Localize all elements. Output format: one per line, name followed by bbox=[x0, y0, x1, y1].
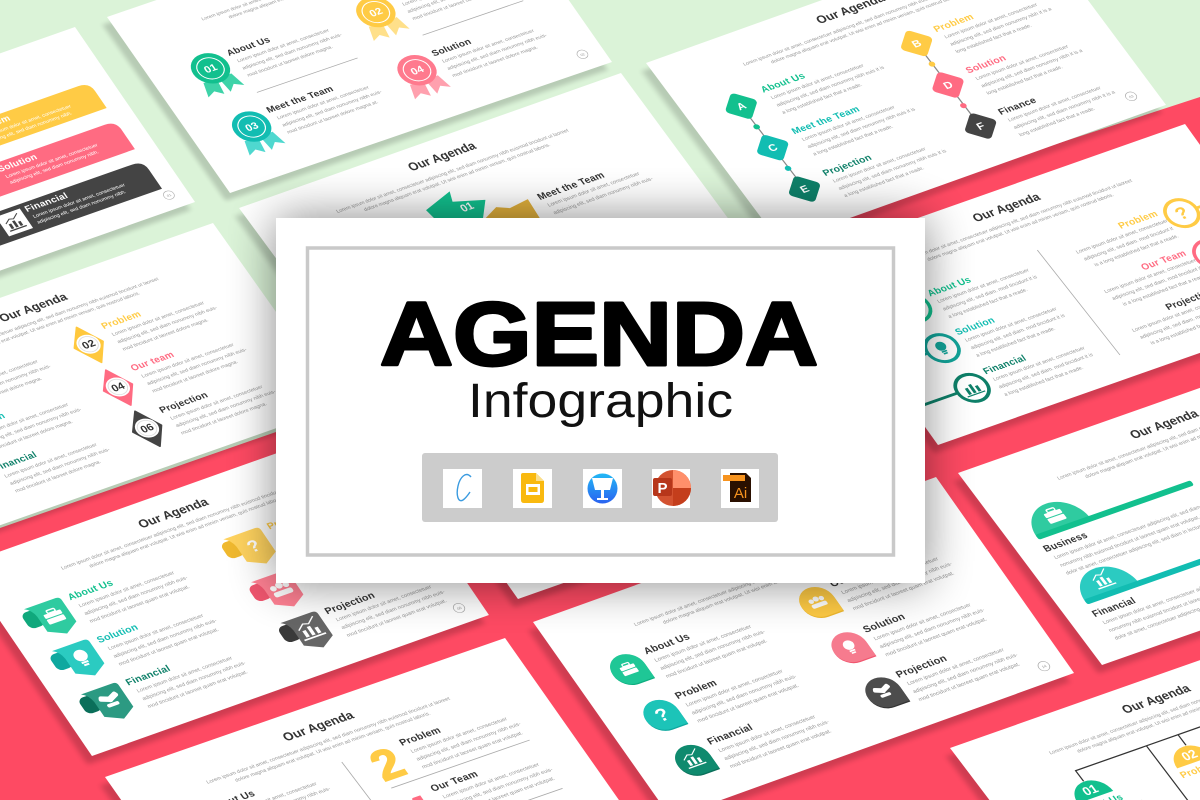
numeral 2: 2 bbox=[360, 739, 415, 791]
badge 01: 01 bbox=[202, 62, 220, 76]
projection bbox=[157, 370, 283, 438]
icon: powerpoint bbox=[652, 469, 691, 508]
about us: About Us bbox=[366, 216, 415, 240]
title: Our Agenda bbox=[280, 708, 357, 744]
slide: ribbon icons, lower left bbox=[0, 424, 493, 765]
about us: About Us bbox=[642, 632, 693, 657]
about us bbox=[642, 609, 773, 681]
financial body: Lorem ipsum dolor sit amet, consectetuer bbox=[32, 183, 127, 220]
about us bbox=[925, 256, 1045, 321]
projection: adipiscing elit, sed diam nonummy nibh euis- bbox=[175, 389, 278, 429]
projection bbox=[323, 570, 452, 640]
about us: adipiscing elit, sed diam nonummy nibh euis it is bbox=[775, 65, 886, 108]
subtitle: dolore magna aliquam erat volutpat. Ut wisi enim ad minim veniam, quis nostrud laboris. bbox=[926, 193, 1115, 263]
projection: Lorem ipsum dolor sit amet, consectetuer bbox=[832, 146, 928, 184]
finance: Lorem ipsum dolor sit amet, consectetuer bbox=[1007, 86, 1103, 123]
solution: long established fact that a reade. bbox=[986, 65, 1064, 96]
solution: adipiscing elit, sed diam nonummy nibh euis- bbox=[112, 618, 219, 660]
subtitle: Lorem ipsum dolor sit amet, consectetuer adipiscing elit, sed diam nonummy nibh euismod tincidunt ut laoreet bbox=[205, 696, 452, 785]
subtitle: Lorem ipsum dolor sit amet, consectetuer adipiscing elit, sed diam nonummy nibh euismod tincidunt ut laoreet bbox=[335, 128, 571, 215]
about us: Lorem ipsum dolor sit amet, consectetuer bbox=[770, 63, 866, 101]
diamond A: A bbox=[734, 101, 749, 113]
meet the team: mod tincidunt ut laoreet dolore magna at. bbox=[286, 100, 380, 135]
title: Our Agenda bbox=[135, 495, 212, 531]
pink bar bbox=[0, 121, 135, 210]
slide: bars agenda, top left bbox=[0, 27, 199, 345]
drop: financial bbox=[668, 740, 720, 780]
diamond F: F bbox=[974, 121, 988, 133]
circle: problem bbox=[1159, 181, 1200, 231]
solution bbox=[964, 30, 1090, 97]
page number: 14 bbox=[1041, 663, 1048, 669]
finance: long established fact that a reade. bbox=[1018, 106, 1097, 138]
solution: adipiscing elit, sed diam nonummy nibh it is a bbox=[980, 48, 1084, 89]
problem bbox=[397, 702, 528, 772]
dome: business bbox=[1019, 459, 1194, 540]
page number bbox=[1123, 91, 1139, 102]
financial: Lorem ipsum dolor sit amet, consectetuer bbox=[4, 442, 99, 479]
arrow 01: 01 bbox=[458, 201, 477, 215]
drop: our team bbox=[792, 582, 844, 623]
slide: circles, right bbox=[796, 123, 1200, 453]
main card bbox=[276, 218, 925, 583]
meet the team bbox=[264, 70, 389, 137]
problem: Problem bbox=[932, 12, 977, 35]
solution: adipiscing elit, sed diam nonummy nibh euis- bbox=[446, 33, 549, 72]
projection: Lorem ipsum dolor sit amet, consectetuer bbox=[169, 384, 265, 421]
about us: About Us bbox=[224, 34, 272, 58]
slide: hidden behind card, bottom bbox=[376, 274, 906, 607]
meet the team: Meet the Team bbox=[264, 83, 335, 115]
marker 06: 06 bbox=[138, 422, 157, 436]
financial bbox=[705, 699, 837, 771]
problem: Lorem ipsum dolor sit amet, consectetuer bbox=[944, 2, 1039, 40]
problem bbox=[673, 654, 804, 725]
financial: a long established fact that a reade. bbox=[1003, 365, 1085, 398]
problem: Problem bbox=[99, 309, 144, 332]
about us: mod tincidunt ut laoreet quam erat volutpat. bbox=[89, 584, 192, 625]
about us: Lorem ipsum dolor sit amet, consectetuer bbox=[654, 624, 753, 664]
meet the team: Meet the Team bbox=[535, 170, 607, 203]
solution body: adipiscing elit, sed diam nonummy nibh. bbox=[9, 150, 100, 186]
circle: about us bbox=[857, 291, 937, 338]
our team: mod tincidunt ut laoreet quam erat volutpat. bbox=[852, 571, 956, 612]
projection: mod tincidunt ut laoreet quam erat volutpat. bbox=[917, 662, 1022, 703]
slide: big numerals, bottom left bbox=[97, 638, 644, 800]
dark bar bbox=[0, 161, 162, 249]
financial: mod tincidunt ut laoreet dolore magna. bbox=[14, 459, 103, 494]
our team: adipiscing elit, sed diam nonummy nibh euis- bbox=[146, 347, 249, 387]
solution bbox=[861, 588, 992, 659]
problem: Lorem ipsum dolor sit amet, consectetuer bbox=[1075, 218, 1170, 255]
financial: Financial bbox=[705, 723, 755, 747]
about us: About Us bbox=[925, 275, 974, 299]
slide: teardrops, bottom centre bbox=[525, 477, 1078, 800]
meet the team: adipiscing elit, sed diam nonummy nibh euis it is bbox=[806, 107, 917, 150]
node 01: 01 bbox=[1079, 781, 1101, 798]
ribbon: solution bbox=[46, 639, 109, 685]
diamond E: E bbox=[798, 184, 812, 196]
financial body: adipiscing elit, sed diam nonummy nibh. bbox=[36, 190, 128, 225]
projection: Projection bbox=[323, 591, 378, 617]
problem: adipiscing elit, sed diam nonummy nibh euis- bbox=[691, 674, 798, 716]
problem: long established fact that a reade. bbox=[955, 23, 1033, 55]
finance: adipiscing elit, sed diam nonummy nibh it is a bbox=[1013, 90, 1117, 131]
about us: a long established fact that a reade. bbox=[947, 287, 1029, 320]
page number bbox=[161, 190, 176, 201]
title: Our Agenda bbox=[970, 190, 1043, 225]
financial: adipiscing elit, sed diam. mod tincidunt it is bbox=[998, 352, 1095, 390]
financial bbox=[0, 428, 117, 496]
title: Our Agenda bbox=[1119, 681, 1194, 716]
icon: google slides bbox=[513, 469, 552, 508]
projection: Projection bbox=[157, 390, 211, 416]
page number bbox=[575, 49, 590, 60]
meet the team: adipiscing elit, sed diam nonummy nibh euis- bbox=[552, 176, 655, 216]
financial: Financial bbox=[124, 664, 173, 688]
marker 02: 02 bbox=[80, 338, 98, 352]
arrow 01 bbox=[419, 182, 501, 238]
slide: arrows agenda, behind card bbox=[231, 73, 765, 406]
projection: adipiscing elit, sed diam nonummy nibh euis it is bbox=[837, 148, 948, 192]
solution bbox=[429, 14, 554, 80]
drop: problem: ? bbox=[650, 704, 674, 726]
solution: Lorem ipsum dolor sit amet, consectetuer bbox=[107, 613, 205, 652]
slide: hexagon numbers, left bbox=[0, 223, 346, 548]
diamond D bbox=[921, 65, 982, 114]
our team: Lorem ipsum dolor sit amet, consectetuer bbox=[442, 762, 541, 800]
icon: illustrator bbox=[721, 469, 759, 508]
slide: domes, right lower bbox=[950, 338, 1200, 674]
node 01 bbox=[1066, 775, 1113, 800]
finance: Finance bbox=[996, 96, 1039, 117]
projection: Projection bbox=[894, 654, 950, 680]
problem bbox=[389, 0, 514, 23]
our team: Our Team bbox=[828, 564, 880, 590]
about us: About Us bbox=[66, 578, 116, 603]
icon: canva bbox=[443, 469, 482, 508]
our team: Lorem ipsum dolor sit amet, consectetuer bbox=[1103, 258, 1198, 295]
solution: Lorem ipsum dolor sit amet, consectetuer bbox=[873, 603, 973, 642]
page number: 03 bbox=[1128, 95, 1135, 99]
marker 06 bbox=[121, 407, 173, 451]
about us: About Us bbox=[759, 71, 808, 95]
diamond E bbox=[778, 169, 831, 209]
problem: Problem bbox=[1116, 209, 1161, 231]
problem: Problem bbox=[265, 509, 311, 532]
about us bbox=[224, 13, 349, 80]
our team bbox=[1095, 247, 1200, 310]
solution: mod tincidunt ut laoreet quam erat volutpat. bbox=[118, 627, 221, 667]
financial: Lorem ipsum dolor sit amet, consectetuer bbox=[136, 656, 234, 694]
dome: financial bbox=[1067, 523, 1200, 605]
financial: Lorem ipsum dolor sit amet, consectetuer bbox=[718, 714, 817, 754]
marker 04: 04 bbox=[109, 381, 128, 394]
our team: Our Team bbox=[429, 769, 481, 794]
financial bbox=[981, 334, 1100, 399]
problem: mod tincidunt ut laoreet quam erat volutpat. bbox=[696, 683, 801, 724]
subtitle: Lorem ipsum dolor sit amet, consectetuer adipiscing elit, sed diam nonummy nibh euismod tincidunt ut laoreet bbox=[899, 178, 1134, 264]
meet the team: Meet the Team bbox=[790, 104, 862, 137]
financial: mod tincidunt ut laoreet quam erat volutpat. bbox=[147, 669, 250, 710]
finance bbox=[996, 72, 1122, 139]
our team: Our Team bbox=[1139, 248, 1189, 273]
marker 02 bbox=[63, 323, 115, 367]
diamond C: C bbox=[766, 142, 781, 154]
circle: problem: ? bbox=[1170, 203, 1193, 223]
connector lines bbox=[1076, 700, 1200, 800]
about us: mod tincidunt ut laoreet quam erat volutpat. bbox=[665, 638, 769, 680]
our team bbox=[828, 542, 959, 613]
badge 03 bbox=[224, 106, 287, 157]
about us bbox=[66, 556, 195, 626]
about us: adipiscing elit, sed diam nonummy nibh euis- bbox=[241, 32, 344, 71]
our team: mod tincidunt ut laoreet dolore magna. bbox=[151, 359, 240, 394]
projection: Lorem ipsum dolor sit amet, consectetuer bbox=[335, 584, 433, 623]
financial: mod tincidunt ut laoreet quam erat volutpat. bbox=[729, 729, 833, 770]
projection: mod tincidunt ut laoreet quam erat volutpat. bbox=[346, 598, 449, 639]
ribbon: problem bbox=[218, 527, 281, 573]
solution: mod tincidunt ut laoreet quam erat volutpat. bbox=[884, 617, 989, 658]
solution bbox=[0, 388, 89, 455]
circle: financial bbox=[896, 370, 995, 424]
solution body: Lorem ipsum dolor sit amet, consectetuer bbox=[5, 143, 100, 180]
projection: a long established fact that a reade. bbox=[843, 166, 926, 199]
meet the team bbox=[535, 157, 655, 217]
financial: Financial bbox=[981, 353, 1029, 377]
projection: mod tincidunt ut laoreet dolore magna. bbox=[180, 402, 268, 436]
problem: mod tincidunt ut laoreet quam erat volutpat. bbox=[421, 730, 525, 770]
drop: problem bbox=[636, 695, 688, 735]
title: Our Agenda bbox=[707, 547, 786, 584]
financial: adipiscing elit, sed diam nonummy nibh euis- bbox=[9, 447, 112, 487]
circle: solution bbox=[886, 331, 965, 377]
about us: adipiscing elit, sed diam. mod tincidunt it is bbox=[942, 274, 1039, 312]
icon: illustrator: Ai bbox=[734, 485, 747, 502]
diamond C bbox=[746, 128, 806, 177]
node 02: 02 bbox=[1178, 747, 1200, 763]
our team bbox=[429, 747, 560, 800]
solution bbox=[95, 599, 224, 669]
projection: adipiscing elit, sed diam nonummy nibh euis- bbox=[340, 589, 446, 631]
about us: a long established fact that a reade. bbox=[781, 82, 864, 116]
badge 04: 04 bbox=[408, 64, 427, 78]
icon: chart box bbox=[0, 209, 33, 236]
problem: is a long established fact that a reade. bbox=[1093, 234, 1180, 268]
diamond A bbox=[715, 87, 775, 135]
ribbon: financial bbox=[75, 682, 138, 728]
our team: Lorem ipsum dolor sit amet, consectetuer bbox=[841, 556, 940, 596]
title: Our Agenda bbox=[405, 139, 479, 174]
drop: projection bbox=[858, 673, 910, 713]
solution: Lorem ipsum dolor sit amet, consectetuer bbox=[441, 28, 536, 64]
financial: adipiscing elit, sed diam nonummy nibh euis- bbox=[723, 719, 831, 762]
node 02 bbox=[1165, 741, 1200, 768]
title: agenda: AGENDA bbox=[380, 285, 818, 385]
meet the team: adipiscing elit, sed diam nonummy nibh euis- bbox=[281, 89, 384, 128]
slide: diamonds agenda, top right bbox=[638, 0, 1170, 251]
problem: Lorem ipsum dolor sit amet, consectetuer bbox=[111, 301, 206, 338]
subtitle: dolore magna aliquam erat volutpat. Ut wisi enim ad minim veniam, quis nostrud laboris. bbox=[234, 711, 432, 783]
problem bbox=[99, 286, 224, 354]
drop: about us bbox=[603, 649, 655, 690]
solution: Lorem ipsum dolor sit amet, consectetuer bbox=[964, 306, 1059, 343]
diamond D: D bbox=[941, 79, 956, 92]
projection bbox=[894, 633, 1025, 704]
problem: Problem bbox=[397, 726, 444, 748]
solution: Solution bbox=[861, 612, 908, 635]
financial: Financial bbox=[1090, 596, 1138, 620]
problem bbox=[1067, 207, 1181, 271]
problem: Lorem ipsum dolor sit amet, consectetuer bbox=[410, 717, 509, 755]
diamond B: B bbox=[910, 38, 924, 50]
diamond F bbox=[954, 107, 1007, 146]
subtitle: dolore magna aliquam erat volutpat. Ut wisi enim ad minim veniam, quis nostrud laboris. bbox=[88, 496, 284, 569]
problem: adipiscing elit, sed diam. mod tincidunt it bbox=[1083, 226, 1175, 262]
ribbon: our team bbox=[245, 570, 308, 616]
projection: Projection bbox=[821, 153, 874, 178]
about us: Lorem ipsum dolor sit amet, consectetuer bbox=[936, 268, 1031, 305]
subtitle: dolore magna aliquam erat volutpat. Ut wisi enim ad minim veniam, quis nostrud laboris. bbox=[662, 550, 861, 626]
solution: Solution bbox=[953, 315, 998, 338]
problem: Problem bbox=[673, 678, 720, 702]
problem: adipiscing elit, sed diam nonummy nibh euis- bbox=[116, 305, 219, 345]
solution: adipiscing elit, sed diam nonummy nibh euis- bbox=[879, 608, 986, 650]
solution: mod tincidunt ut laoreet dolore magna. bbox=[451, 45, 539, 79]
badge 03: 03 bbox=[243, 120, 261, 134]
problem: mod tincidunt ut laoreet dolore magna. bbox=[121, 318, 210, 352]
our team: adipiscing elit, sed diam nonummy nibh euis- bbox=[846, 561, 954, 604]
software icon bar bbox=[422, 453, 778, 522]
shadow: main card bbox=[276, 218, 925, 583]
meet the team: Lorem ipsum dolor sit amet, consectetuer bbox=[547, 171, 641, 208]
about us: Lorem ipsum dolor sit amet, consectetuer bbox=[236, 28, 331, 64]
solution: Solution bbox=[964, 53, 1009, 76]
page number: 06 bbox=[456, 605, 463, 611]
icon: powerpoint: P bbox=[657, 480, 668, 497]
about us: adipiscing elit, sed diam nonummy nibh euis- bbox=[659, 629, 767, 672]
diamond B bbox=[890, 24, 950, 72]
icon: keynote bbox=[583, 469, 622, 508]
about us: adipiscing elit, sed diam nonummy nibh euis- bbox=[83, 575, 189, 617]
financial bbox=[124, 641, 253, 711]
arrow 02 bbox=[476, 197, 549, 245]
solution bbox=[953, 295, 1072, 360]
page number bbox=[451, 602, 467, 614]
solution: a long established fact that a reade. bbox=[975, 326, 1057, 359]
page number: 01 bbox=[166, 193, 172, 198]
financial text: Financial bbox=[22, 190, 70, 214]
ribbon: about us bbox=[18, 597, 81, 643]
circle: our team bbox=[1188, 222, 1200, 271]
about us: mod tincidunt ut laoreet dolore magna. bbox=[246, 45, 334, 78]
ribbon: projection bbox=[275, 611, 338, 657]
meet the team: a long established fact that a reade. bbox=[812, 124, 895, 157]
projection bbox=[1123, 286, 1200, 349]
our team: Lorem ipsum dolor sit amet, consectetuer bbox=[141, 342, 236, 379]
badge 02 bbox=[348, 0, 411, 43]
page number bbox=[1036, 660, 1052, 672]
subtitle: Lorem ipsum dolor sit amet, consectetuer adipiscing elit, sed diam nonummy nibh euismod tincidunt ut laoreet bbox=[60, 481, 304, 571]
problem: Lorem ipsum dolor sit amet, consectetuer bbox=[685, 669, 785, 708]
ribbon: problem: ? bbox=[243, 536, 265, 556]
badge 01 bbox=[183, 48, 245, 99]
projection: Lorem ipsum dolor sit amet, consectetuer bbox=[906, 647, 1006, 687]
solution: adipiscing elit, sed diam. mod tincidunt it is bbox=[970, 313, 1067, 351]
projection bbox=[821, 130, 954, 200]
financial: adipiscing elit, sed diam nonummy nibh euis- bbox=[141, 661, 247, 702]
our team: Our team bbox=[129, 350, 177, 374]
problem bbox=[932, 0, 1059, 56]
subtitle: Lorem ipsum dolor sit amet, consectetuer adipiscing elit, sed diam nonummy nibh euismod tincidunt ut laoreet bbox=[633, 535, 881, 628]
problem: adipiscing elit, sed diam nonummy nibh euis- bbox=[415, 722, 523, 762]
business: Business bbox=[1041, 531, 1091, 555]
marker 04 bbox=[92, 365, 144, 410]
slide: ribbon badges, top centre bbox=[99, 0, 616, 201]
title: Our Agenda bbox=[1127, 407, 1200, 442]
financial bbox=[1090, 546, 1200, 643]
yellow bar bbox=[0, 82, 107, 169]
financial: Lorem ipsum dolor sit amet, consectetuer bbox=[992, 346, 1087, 383]
meet the team: Lorem ipsum dolor sit amet, consectetuer bbox=[801, 105, 897, 143]
our team bbox=[129, 328, 254, 396]
projection: adipiscing elit, sed diam nonummy nibh euis- bbox=[912, 653, 1020, 695]
badge 02: 02 bbox=[367, 6, 385, 19]
subtitle: dolore magna aliquam erat volutpat. Ut wisi enim ad minim veniam, quis nostrud laboris. bbox=[363, 142, 552, 213]
page number: 02 bbox=[580, 53, 586, 57]
subtitle: infographic: Infographic bbox=[468, 375, 733, 428]
business bbox=[1041, 481, 1200, 578]
solution: Solution bbox=[429, 36, 473, 58]
about us bbox=[207, 767, 332, 800]
drop: solution bbox=[824, 628, 877, 668]
about us bbox=[1062, 788, 1145, 800]
meet the team bbox=[790, 89, 923, 158]
meet the team: Lorem ipsum dolor sit amet, consectetuer bbox=[276, 85, 371, 121]
problem: adipiscing elit, sed diam nonummy nibh it is a bbox=[949, 7, 1053, 47]
slide: org chart, bottom right bbox=[942, 613, 1200, 800]
about us bbox=[759, 47, 892, 117]
about us: Lorem ipsum dolor sit amet, consectetuer bbox=[78, 570, 176, 609]
solution: Solution bbox=[95, 623, 141, 646]
badge 04 bbox=[389, 50, 452, 101]
solution: Lorem ipsum dolor sit amet, consectetuer bbox=[975, 44, 1070, 82]
